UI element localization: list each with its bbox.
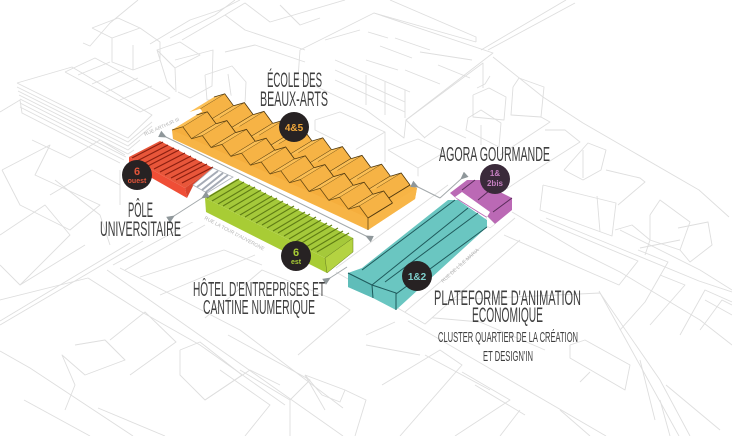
building: École des Beaux-Arts (orange) xyxy=(172,94,417,230)
south-east blocks xyxy=(366,291,720,436)
building: Hôtel d'entreprises (green) xyxy=(205,179,353,273)
badge: 6 ouest: 6 xyxy=(134,166,140,178)
building: Plateforme d'animation (teal) xyxy=(348,200,487,310)
badge: 1 & 2bis: 1& xyxy=(490,169,500,178)
badge: 4&5 xyxy=(279,112,309,142)
badge: 6 est: 6 xyxy=(293,247,299,259)
label: Plateforme d'animation économique: ECONOMIQUE xyxy=(472,304,543,327)
label: Pôle universitaire: PÔLE xyxy=(128,199,153,222)
label: Plateforme d'animation économique: ET DESIGN'IN xyxy=(483,348,533,365)
north-east blocks xyxy=(315,76,580,190)
road outlines around buildings xyxy=(336,185,520,324)
badge: 1&2 xyxy=(402,261,432,291)
east blocks xyxy=(504,143,732,345)
badge: 6 ouest xyxy=(122,160,152,190)
label: Plateforme d'animation économique xyxy=(434,287,581,365)
label: Pôle universitaire xyxy=(100,199,181,241)
building: Agora gourmande (purple) xyxy=(450,180,512,228)
street arrows xyxy=(166,137,461,278)
label: Pôle universitaire: UNIVERSITAIRE xyxy=(100,218,181,241)
badge: 1 & 2bis: 2bis xyxy=(487,179,504,188)
white site platform under the buildings xyxy=(122,93,522,324)
label: Hôtel d'entreprises et cantine numérique xyxy=(193,278,325,319)
label: École des Beaux-Arts xyxy=(260,69,328,111)
label: École des Beaux-Arts: BEAUX-ARTS xyxy=(260,88,328,111)
badge: 1&2: 1&2 xyxy=(408,272,427,283)
label: Agora gourmande: AGORA GOURMANDE xyxy=(439,144,550,166)
label: Hôtel d'entreprises et cantine numérique: CANTINE NUMERIQUE xyxy=(203,297,315,319)
street name: rue La Tour d'Auvergne: RUE LA TOUR D'AUVERGNE xyxy=(203,215,266,253)
building: Pôle universitaire (red) xyxy=(129,141,213,198)
badge: 6 est: est xyxy=(291,259,302,266)
grey striped passage between buildings xyxy=(193,168,233,193)
badge: 6 ouest: ouest xyxy=(128,178,147,185)
badge: 6 est xyxy=(281,241,311,271)
label: Hôtel d'entreprises et cantine numérique: HÔTEL D'ENTREPRISES ET xyxy=(193,278,325,301)
street name: rue de l'Île Maria: RUE DE L'ÎLE MARIA xyxy=(440,246,481,284)
large central hall with skylights xyxy=(298,0,729,217)
street name: rue Arthur III: RUE ARTHUR III xyxy=(143,117,180,138)
label: Plateforme d'animation économique: CLUSTER QUARTIER DE LA CRÉATION xyxy=(438,329,578,346)
label: Plateforme d'animation économique: PLATEFORME D'ANIMATION xyxy=(434,287,581,310)
south-west blocks xyxy=(0,140,366,436)
north-west blocks xyxy=(65,0,345,112)
badge: 1 & 2bis xyxy=(480,164,510,194)
label: École des Beaux-Arts: ÉCOLE DES xyxy=(267,69,322,92)
striped slab building xyxy=(0,67,152,163)
badge: 4&5: 4&5 xyxy=(285,123,304,134)
